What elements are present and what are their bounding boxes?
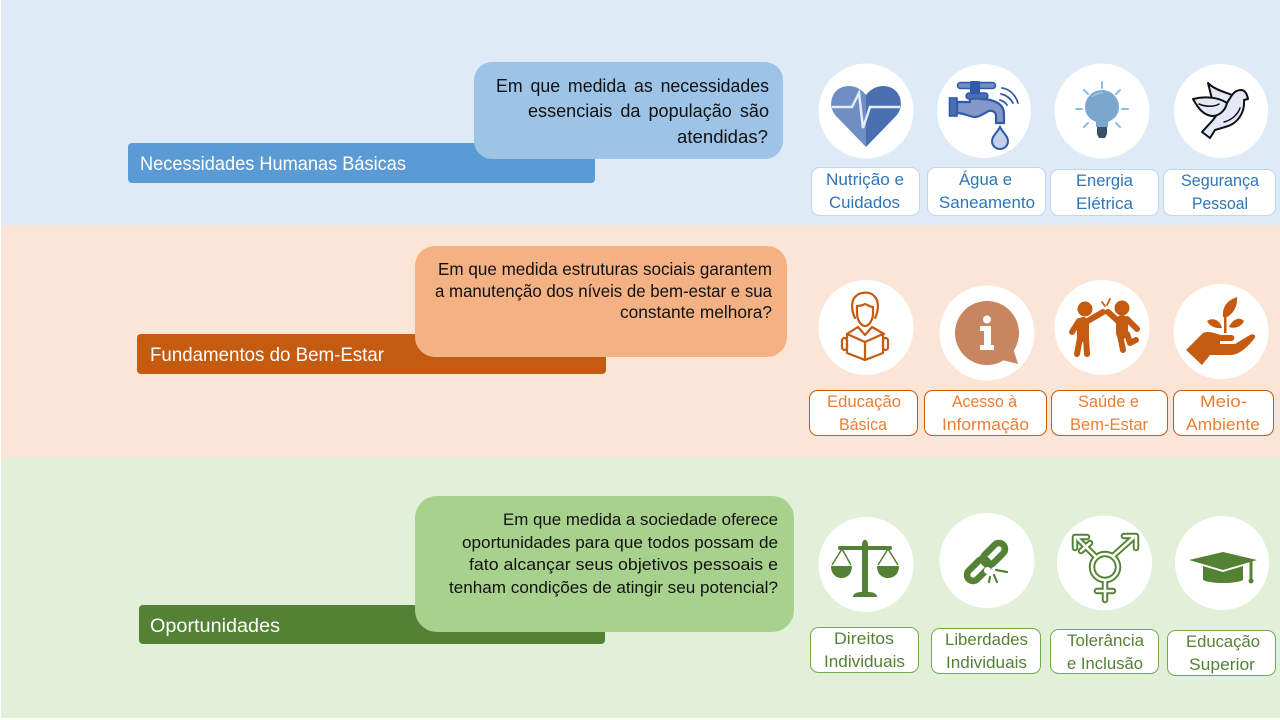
heading bar: oportunidades xyxy=(139,605,605,644)
label: nutrição e cuidados: Nutrição e xyxy=(826,170,904,189)
panel: necessidades humanas básicas xyxy=(1,0,1280,225)
icon: light bulb xyxy=(1054,64,1150,158)
label: liberdades individuais xyxy=(932,628,1040,674)
icon: hand holding plant xyxy=(1174,284,1268,379)
label: nutrição e cuidados xyxy=(812,168,920,216)
label: acesso à informação: Informação xyxy=(942,415,1029,434)
icon: student reading xyxy=(818,280,914,375)
label: educação básica xyxy=(810,390,918,436)
heading bar: fundamentos do bem-estar xyxy=(137,334,606,374)
label: energia elétrica xyxy=(1050,170,1158,216)
icon: heart with pulse xyxy=(818,64,914,158)
icon: gender inclusion symbol xyxy=(1057,516,1152,610)
callout: necessidades essenciais: Em que medida as necessidades xyxy=(496,76,769,96)
label: educação básica: Básica xyxy=(839,415,888,434)
icon: broken chain link xyxy=(940,513,1034,608)
label: saúde e bem-estar: Bem-Estar xyxy=(1070,415,1148,434)
callout: estruturas sociais: Em que medida estruturas sociais garantem xyxy=(438,259,772,279)
label: água e saneamento: Água e xyxy=(959,170,1012,189)
panel: fundamentos do bem-estar xyxy=(1,225,1280,458)
callout: estruturas sociais xyxy=(415,246,787,357)
label: energia elétrica: Elétrica xyxy=(1076,194,1134,213)
icon: graduation cap xyxy=(1175,516,1269,610)
label: educação superior: Educação xyxy=(1186,632,1260,651)
label: liberdades individuais: Individuais xyxy=(946,653,1027,672)
label: água e saneamento: Saneamento xyxy=(939,193,1035,212)
heading bar: necessidades humanas básicas: Necessidades Humanas Básicas xyxy=(140,153,406,175)
label: liberdades individuais: Liberdades xyxy=(945,630,1028,649)
icon: scales of justice xyxy=(818,517,914,612)
panel: oportunidades xyxy=(1,458,1280,718)
callout: estruturas sociais: a manutenção dos níveis de bem-estar e sua xyxy=(435,281,772,301)
label: nutrição e cuidados: Cuidados xyxy=(829,193,900,212)
icon: water tap xyxy=(937,64,1031,158)
label: meio-ambiente xyxy=(1174,390,1274,436)
label: educação superior: Superior xyxy=(1189,655,1255,674)
label: tolerância e inclusão: e Inclusão xyxy=(1067,654,1143,673)
icon: high five xyxy=(1054,280,1150,375)
heading bar: necessidades humanas básicas xyxy=(128,143,595,183)
callout: necessidades essenciais: atendidas? xyxy=(677,127,768,147)
icon: information bubble xyxy=(940,286,1034,380)
label: energia elétrica: Energia xyxy=(1076,171,1134,190)
label: educação superior xyxy=(1168,630,1276,676)
label: meio-ambiente: Meio- xyxy=(1200,392,1247,411)
label: saúde e bem-estar xyxy=(1052,390,1168,436)
label: água e saneamento xyxy=(928,168,1046,216)
label: tolerância e inclusão xyxy=(1050,630,1158,674)
callout: oportunidades: tenham condições de atingir seu potencial? xyxy=(449,578,778,597)
heading bar: oportunidades: Oportunidades xyxy=(150,615,280,637)
icon: dove xyxy=(1174,64,1268,158)
heading bar: fundamentos do bem-estar: Fundamentos do Bem-Estar xyxy=(150,344,384,366)
label: acesso à informação: Acesso à xyxy=(952,392,1017,411)
label: direitos individuais: Individuais xyxy=(824,652,905,671)
callout: necessidades essenciais: essenciais da população são xyxy=(528,101,769,121)
callout: oportunidades xyxy=(415,496,794,632)
callout: estruturas sociais: constante melhora? xyxy=(620,302,772,322)
label: tolerância e inclusão: Tolerância xyxy=(1067,631,1145,650)
label: segurança pessoal: Segurança xyxy=(1181,171,1260,190)
callout: necessidades essenciais xyxy=(474,62,783,159)
label: segurança pessoal: Pessoal xyxy=(1192,194,1248,213)
callout: oportunidades: Em que medida a sociedade oferece xyxy=(503,510,778,529)
label: educação básica: Educação xyxy=(827,392,901,411)
label: direitos individuais xyxy=(810,628,918,672)
label: saúde e bem-estar: Saúde e xyxy=(1078,392,1139,411)
callout: oportunidades: oportunidades para que todos possam de xyxy=(462,533,778,552)
callout: oportunidades: fato alcançar seus objetivos pessoais e xyxy=(469,555,778,574)
label: direitos individuais: Direitos xyxy=(834,629,894,648)
label: acesso à informação xyxy=(924,390,1046,436)
label: meio-ambiente: Ambiente xyxy=(1186,415,1260,434)
label: segurança pessoal xyxy=(1164,170,1276,216)
